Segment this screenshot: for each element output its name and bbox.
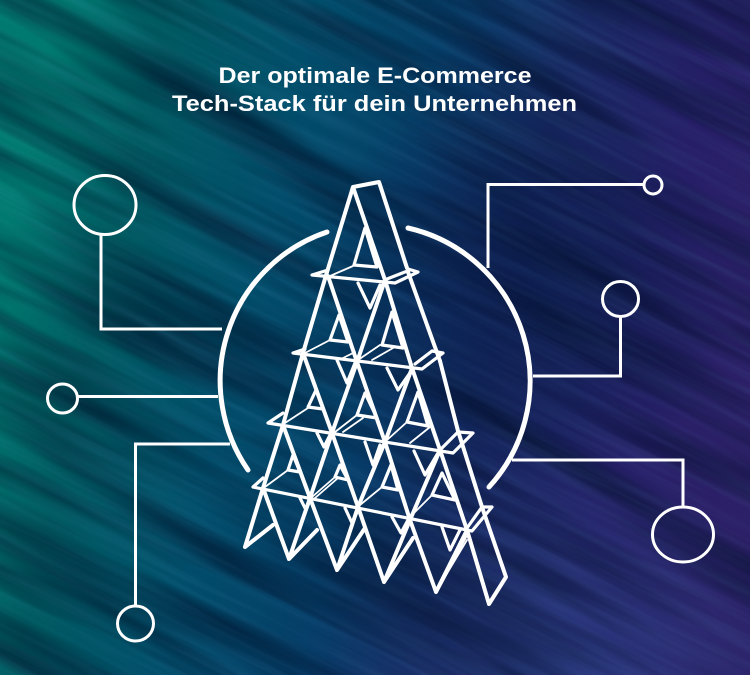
connector: middle right node xyxy=(533,282,638,376)
tower: shelves xyxy=(253,269,492,531)
connector: top left node xyxy=(74,176,222,329)
connector: middle left node xyxy=(48,384,218,413)
tower: inner triangles xyxy=(288,228,455,500)
tower: thin back edges xyxy=(265,266,467,585)
connector: top right node xyxy=(488,176,662,268)
title: Der optimale E-Commerce xyxy=(218,63,532,88)
title xyxy=(172,63,577,116)
house of cards tower xyxy=(245,182,506,604)
connector: bottom left node xyxy=(118,444,230,641)
title: Tech-Stack für dein Unternehmen xyxy=(172,91,577,116)
connector: bottom right node xyxy=(512,460,714,562)
tower: main card edges xyxy=(245,182,506,604)
tower: inverted gap triangles xyxy=(300,283,460,550)
circular ring around the tower xyxy=(220,228,530,487)
